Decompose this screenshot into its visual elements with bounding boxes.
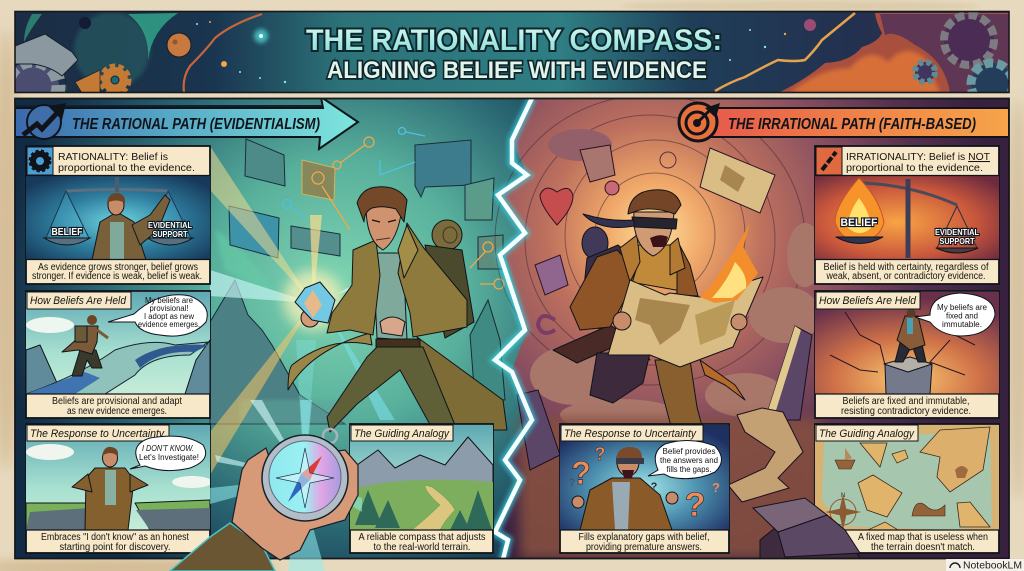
- speech bubble: [648, 440, 722, 479]
- speech bubble: the answers and: [660, 456, 718, 465]
- right irrational background: [495, 95, 1009, 559]
- scale illustration: BELIEF: [52, 226, 83, 238]
- panel: irrationality: Belief is held with certainty, regardless of: [824, 262, 989, 273]
- panel: irrationality: proportional to the evidence.: [846, 162, 983, 174]
- panel: rationality: [26, 146, 210, 284]
- title: ALIGNING BELIEF WITH EVIDENCE: [327, 57, 707, 84]
- panel: response to uncertainty (rational): starting point for discovery.: [60, 542, 170, 553]
- scale illustration: [26, 176, 210, 260]
- panel: how beliefs are held (irrational): resisting contradictory evidence.: [841, 406, 971, 417]
- panel: guiding analogy (irrational): the terrain doesn't match.: [871, 542, 975, 553]
- panel: response to uncertainty (irrational): ?: [712, 480, 720, 495]
- icon: rising arrow: [23, 103, 66, 139]
- panel: guiding analogy (irrational): The Guiding Analogy: [819, 428, 915, 440]
- lightning bolt divider: [495, 98, 532, 571]
- speech bubble: fixed and: [946, 312, 978, 320]
- dust clouds: [530, 129, 823, 431]
- flaming scale illustration: EVIDENTIAL: [935, 227, 979, 237]
- hand holding compass: [170, 400, 362, 571]
- panel: response to uncertainty (irrational): ?: [594, 444, 606, 464]
- header banner: [16, 12, 1008, 92]
- foreground rock: [753, 498, 860, 559]
- panel: response to uncertainty (irrational): ?: [651, 481, 658, 493]
- ruined columns: [765, 326, 812, 420]
- panel: rationality: As evidence grows stronger, belief grows: [38, 262, 198, 273]
- panel: response to uncertainty (irrational): The Response to Uncertainty: [564, 428, 697, 440]
- flaming scale illustration: SUPPORT: [940, 236, 975, 246]
- NotebookLM badge: [946, 559, 1024, 571]
- flaming scale illustration: [815, 176, 999, 260]
- speech bubble: immutable.: [942, 320, 982, 329]
- light beams from compass: [210, 146, 395, 482]
- panel: rationality: stronger. If evidence is weak, belief is weak.: [32, 271, 202, 282]
- panel: response to uncertainty (irrational): Fills explanatory gaps with belief,: [578, 532, 710, 543]
- panel: response to uncertainty (irrational): providing premature answers.: [586, 542, 702, 553]
- banner: rational path: [15, 97, 358, 149]
- panel: response to uncertainty (irrational): ?: [571, 455, 591, 491]
- speech bubble: [915, 293, 995, 336]
- left nebula: [24, 12, 268, 92]
- panel: rationality: RATIONALITY: Belief is: [58, 151, 168, 163]
- main panel frame: [15, 98, 1009, 558]
- scattered stars: [196, 21, 786, 83]
- panel: how beliefs are held (rational): Beliefs are provisional and adapt: [52, 396, 182, 407]
- panel: response to uncertainty (rational): The Response to Uncertainty: [30, 428, 165, 440]
- speech bubble: My beliefs are: [937, 303, 987, 312]
- panel: rationality: proportional to the evidence.: [58, 162, 195, 174]
- panel: response to uncertainty (irrational): ?: [685, 486, 705, 524]
- panel: guiding analogy (rational): to the real-world terrain.: [374, 542, 470, 553]
- right nebula and gears: [714, 12, 1008, 92]
- title: [306, 24, 722, 84]
- panel: irrationality: weak, absent, or contradictory evidence.: [826, 271, 986, 282]
- speech bubble: provisional!: [150, 304, 188, 313]
- panel: guiding analogy (irrational): N: [841, 493, 845, 499]
- panel: how beliefs are held (rational): as new evidence emerges.: [67, 406, 167, 417]
- compass rays: [210, 400, 362, 571]
- panel: response to uncertainty (rational): [26, 424, 212, 553]
- panel: response to uncertainty (irrational): [560, 424, 729, 553]
- panel: guiding analogy (rational): The Guiding Analogy: [354, 428, 450, 440]
- left rational background: [15, 98, 535, 559]
- banner: rational path: THE RATIONAL PATH (EVIDENTIALISM): [72, 116, 320, 133]
- flaming scale illustration: BELIEF: [840, 217, 878, 229]
- panel: guiding analogy (rational): A reliable compass that adjusts: [358, 532, 486, 543]
- speech bubble: My beliefs are: [145, 296, 193, 305]
- speech bubble: Belief provides: [662, 447, 716, 456]
- debris: heart, map, scrolls: [540, 188, 573, 225]
- speech bubble: evidence emerges.: [138, 320, 200, 329]
- gears left: [16, 34, 132, 92]
- panel: how beliefs are held (rational): [26, 291, 210, 418]
- header frame: [15, 12, 1009, 92]
- title: THE RATIONALITY COMPASS:: [306, 24, 722, 57]
- panel: guiding analogy (irrational): [815, 424, 999, 553]
- panel: irrationality: [815, 146, 999, 284]
- scale illustration: EVIDENTIAL: [148, 220, 192, 230]
- compass: [262, 429, 348, 521]
- panel: response to uncertainty (rational): Embraces "I don't know" as an honest: [41, 532, 189, 543]
- panel: guiding analogy (irrational): A fixed map that is useless when: [858, 532, 988, 543]
- irrational explorer: [553, 190, 763, 430]
- floating documents: [228, 138, 504, 270]
- panel: how beliefs are held (irrational): How Beliefs Are Held: [819, 295, 917, 307]
- speech bubble: Let's Investigate!: [139, 453, 199, 462]
- mountains: [210, 280, 345, 424]
- panel: how beliefs are held (rational): How Beliefs Are Held: [30, 295, 127, 307]
- glowing compass in hand: [295, 282, 335, 327]
- speech bubble: fills the gaps.: [666, 465, 712, 474]
- panel: how beliefs are held (irrational): [815, 291, 999, 418]
- rational explorer: [288, 187, 507, 432]
- speech bubble: [108, 295, 207, 336]
- panel: irrationality: IRRATIONALITY: Belief is NOT: [846, 151, 991, 163]
- speech bubble: I adopt as new: [144, 312, 194, 321]
- scale illustration: SUPPORT: [152, 229, 188, 239]
- speech bubble: [130, 436, 206, 471]
- panel: response to uncertainty (irrational): ?: [569, 477, 576, 489]
- panel: how beliefs are held (irrational): Beliefs are fixed and immutable,: [842, 396, 970, 407]
- speech bubble: I DON'T KNOW.: [142, 444, 194, 453]
- icon: broken chain: [816, 147, 842, 175]
- icon: gear: [27, 147, 53, 175]
- banner: irrational path: [679, 103, 1009, 141]
- icon: target: [679, 103, 720, 141]
- banner: irrational path: THE IRRATIONAL PATH (FAITH-BASED): [728, 116, 976, 133]
- panel: guiding analogy (rational): [350, 424, 493, 553]
